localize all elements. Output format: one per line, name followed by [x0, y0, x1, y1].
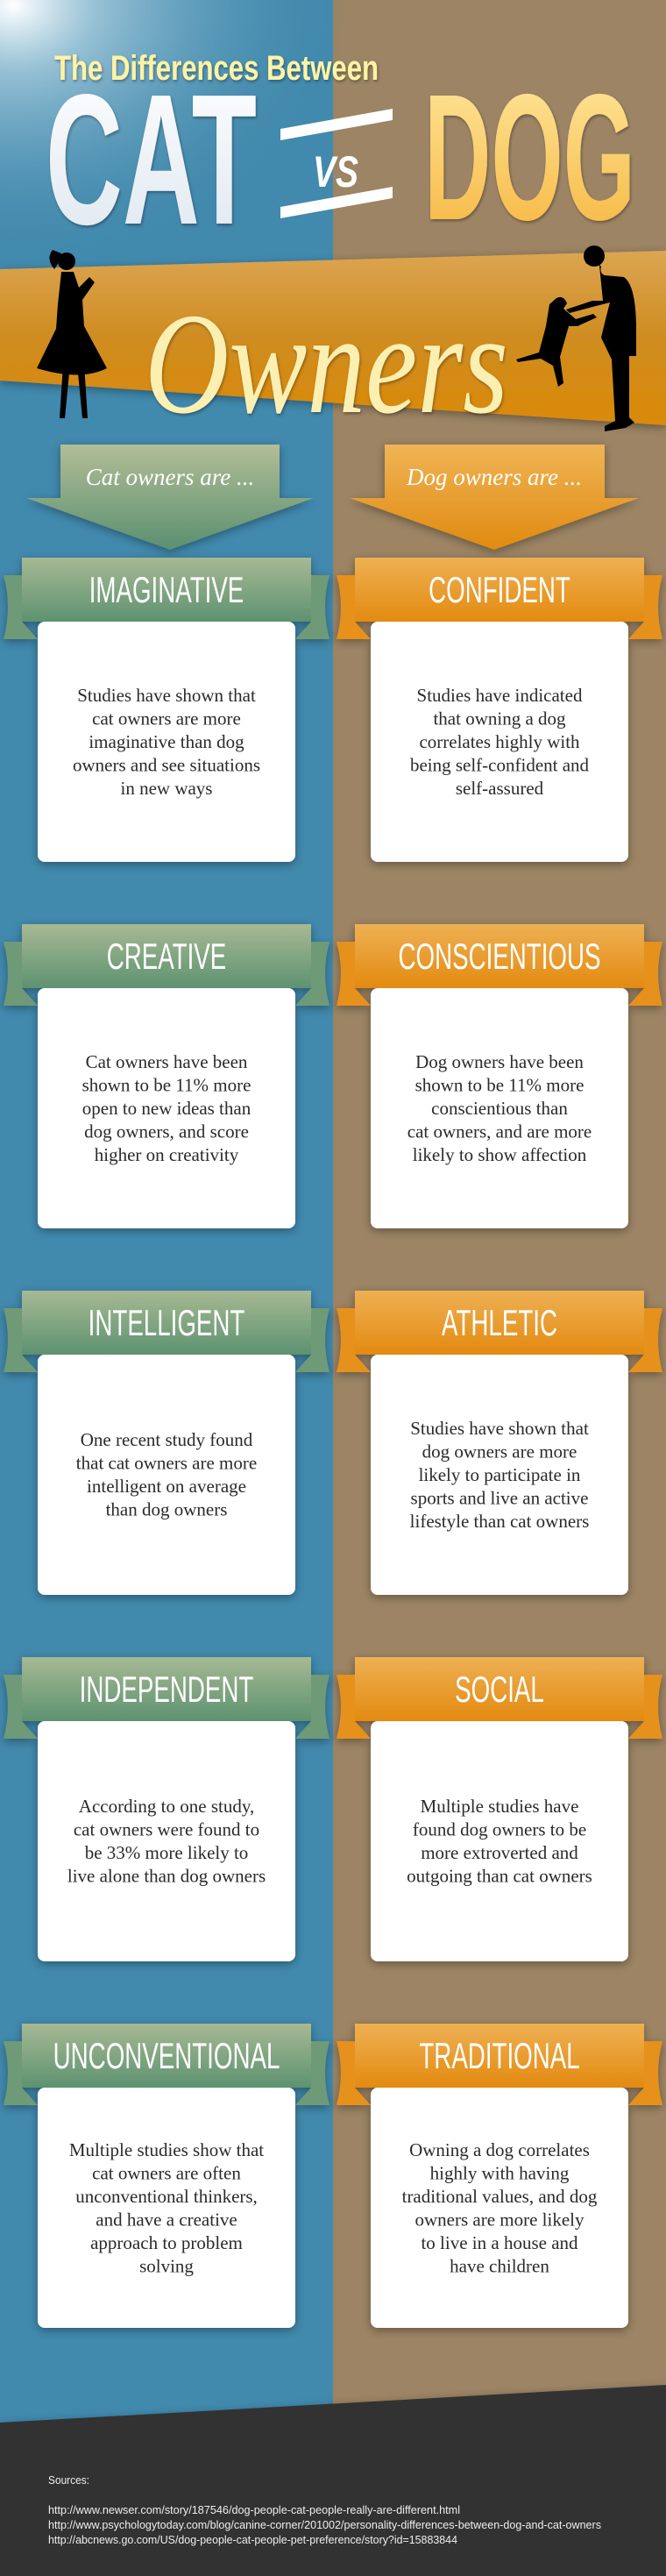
panel: independent: cat owners were found to	[74, 1818, 259, 1839]
panel: social: more extroverted and	[421, 1842, 578, 1863]
panel: conscientious: conscientious than	[431, 1098, 568, 1119]
panel: imaginative: owners and see situations	[73, 754, 260, 775]
panel: traditional: highly with having	[430, 2162, 570, 2183]
panel: creative: CREATIVE	[107, 936, 226, 977]
panel: athletic: Studies have shown that	[410, 1418, 589, 1439]
title: CAT: CAT	[46, 55, 257, 263]
panel: creative: Cat owners have been	[86, 1051, 248, 1072]
panel: athletic: dog owners are more	[422, 1441, 577, 1462]
panel: imaginative: imaginative than dog	[89, 731, 244, 752]
panel: unconventional: cat owners are often	[92, 2162, 241, 2183]
row 3	[4, 1291, 662, 1595]
panel: intelligent: intelligent on average	[87, 1476, 246, 1497]
panel: social: Multiple studies have	[421, 1796, 578, 1817]
panel: unconventional: solving	[139, 2255, 194, 2276]
panel: independent: INDEPENDENT	[80, 1669, 253, 1710]
row 2	[4, 924, 662, 1228]
panel: independent	[4, 1657, 329, 1961]
panel: traditional: Owning a dog correlates	[409, 2139, 590, 2160]
panel: intelligent: INTELLIGENT	[89, 1302, 244, 1343]
panel: unconventional	[4, 2024, 329, 2328]
panel: intelligent	[4, 1291, 329, 1595]
arrow: Cat owners are ...	[26, 445, 314, 550]
panel: imaginative: in new ways	[121, 778, 212, 799]
sources text: Sources:	[48, 2473, 89, 2487]
panel: unconventional: UNCONVENTIONAL	[53, 2035, 280, 2076]
panel: athletic: sports and live an active	[411, 1487, 588, 1508]
panel: conscientious: CONSCIENTIOUS	[399, 936, 600, 977]
panel: athletic: ATHLETIC	[442, 1302, 557, 1343]
panel: confident: being self-confident and	[410, 754, 590, 775]
panel: confident: self-assured	[456, 778, 544, 799]
sources text: http://www.newser.com/story/187546/dog-people-cat-people-really-are-different.html	[48, 2503, 460, 2516]
panel: intelligent: One recent study found	[81, 1429, 253, 1450]
panel: unconventional: and have a creative	[96, 2210, 237, 2231]
panel: traditional: traditional values, and dog	[402, 2186, 598, 2207]
panel: creative: shown to be 11% more	[82, 1075, 251, 1096]
panel: social: SOCIAL	[455, 1669, 544, 1710]
panel: traditional: owners are more likely	[414, 2210, 585, 2231]
panel: conscientious: likely to show affection	[413, 1144, 587, 1165]
panel: confident: that owning a dog	[433, 708, 566, 729]
panel: social: outgoing than cat owners	[407, 1866, 592, 1887]
panel: traditional: have children	[450, 2255, 549, 2276]
footer	[0, 2385, 666, 2576]
title: VS: VS	[313, 147, 358, 196]
panel: traditional: to live in a house and	[421, 2232, 578, 2253]
orange band	[0, 251, 666, 425]
panel: social	[337, 1657, 662, 1961]
arrow: Cat owners are ...: Cat owners are ...	[86, 464, 254, 490]
panel: intelligent: than dog owners	[106, 1499, 227, 1520]
panel: confident: correlates highly with	[419, 731, 580, 752]
row 4	[4, 1657, 662, 1961]
panel: creative: open to new ideas than	[82, 1098, 252, 1119]
panel: independent: live alone than dog owners	[67, 1866, 266, 1887]
title: VS	[280, 109, 393, 218]
panel: social: found dog owners to be	[413, 1818, 586, 1839]
panel: imaginative: IMAGINATIVE	[89, 569, 244, 610]
panel: conscientious: Dog owners have been	[415, 1051, 584, 1072]
background: cat side	[0, 0, 333, 2576]
panel: creative	[4, 924, 329, 1228]
panel: imaginative: Studies have shown that	[77, 685, 256, 706]
panel: confident	[337, 558, 662, 862]
panel: unconventional: unconventional thinkers,	[75, 2186, 258, 2207]
panel: traditional: TRADITIONAL	[419, 2035, 580, 2076]
panel: athletic: likely to participate in	[419, 1464, 581, 1485]
panel: imaginative	[4, 558, 329, 862]
sources text: http://abcnews.go.com/US/dog-people-cat-people-pet-preference/story?id=15883844	[48, 2533, 457, 2546]
panel: imaginative: cat owners are more	[92, 708, 241, 729]
panel: athletic	[337, 1291, 662, 1595]
title: The Differences Between: The Differences Between	[54, 49, 379, 88]
panel: confident: Studies have indicated	[417, 685, 583, 706]
panel: creative: higher on creativity	[95, 1144, 239, 1165]
sources text	[48, 2473, 601, 2546]
panel: unconventional: approach to problem	[90, 2232, 243, 2253]
panel: conscientious: shown to be 11% more	[415, 1075, 584, 1096]
panel: conscientious: cat owners, and are more	[407, 1121, 592, 1142]
panel: athletic: lifestyle than cat owners	[410, 1511, 589, 1532]
arrow: Dog owners are ...: Dog owners are ...	[406, 464, 582, 490]
panel: unconventional: Multiple studies show that	[69, 2139, 264, 2160]
panel: confident: CONFIDENT	[429, 569, 570, 610]
icon: woman with cat silhouette	[37, 250, 107, 418]
arrow: Dog owners are ...	[350, 445, 639, 550]
title: Owners: Owners	[145, 283, 508, 444]
panel: creative: dog owners, and score	[84, 1121, 249, 1142]
sources text: http://www.psychologytoday.com/blog/canine-corner/201002/personality-differences-between-dog-and-cat-owners	[48, 2518, 601, 2531]
row 1	[4, 558, 662, 862]
icon: man with dog silhouette	[516, 246, 636, 431]
panel: independent: be 33% more likely to	[85, 1842, 248, 1863]
row 5	[4, 2024, 662, 2328]
panel: traditional	[337, 2024, 662, 2328]
background: dog side	[333, 0, 666, 2576]
panel: intelligent: that cat owners are more	[76, 1452, 257, 1473]
panel: independent: According to one study,	[79, 1796, 254, 1817]
panel: conscientious	[337, 924, 662, 1228]
